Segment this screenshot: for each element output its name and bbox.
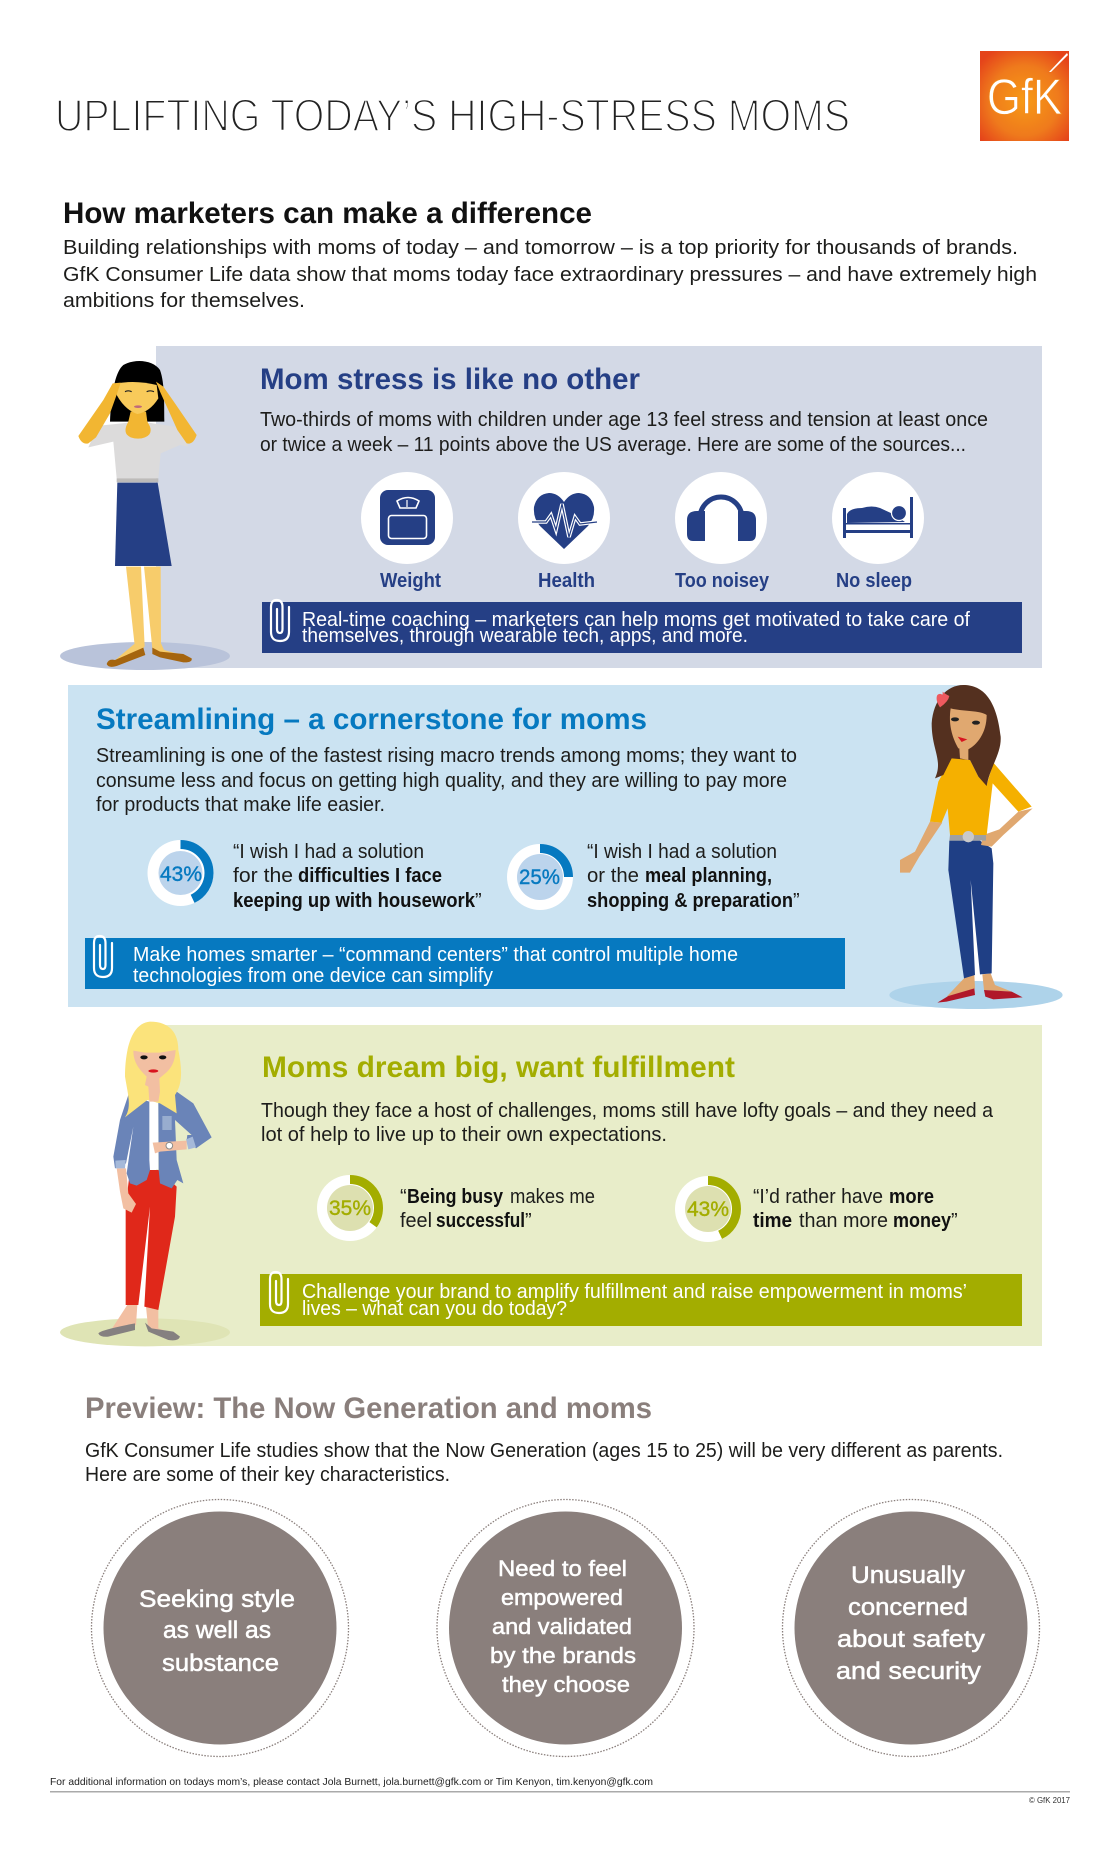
circle: empowered xyxy=(437,1500,694,1756)
circle: safety: Unusually xyxy=(851,1562,965,1589)
circle: empowered: they choose xyxy=(502,1672,630,1697)
quote: housework xyxy=(233,841,482,912)
quote: meal planning: meal planning, xyxy=(645,865,772,887)
callout: real-time coaching xyxy=(262,600,1022,653)
circle: seeking style: Seeking style xyxy=(139,1586,295,1613)
icon: weight scale xyxy=(361,472,453,564)
title: UPLIFTING TODAY’S HIGH-STRESS MOMS xyxy=(55,90,850,141)
illustration: fulfilled mom xyxy=(60,1022,230,1346)
quote: meal planning: ” xyxy=(793,890,800,912)
quote: meal planning xyxy=(587,841,800,912)
illustration: streamlining mom xyxy=(889,685,1063,1009)
quote: being busy: successful xyxy=(436,1210,525,1232)
text: streamlining paragraph: for products that make life easier. xyxy=(96,794,385,816)
quote: more time xyxy=(753,1186,958,1232)
text: goals paragraph: Though they face a host of challenges, moms still have lofty goals – and they need a xyxy=(261,1100,994,1122)
callout: challenge your brand: lives – what can you do today? xyxy=(302,1298,567,1320)
text: preview paragraph: GfK Consumer Life studies show that the Now Generation (ages 15 to 25) will be very different as parents. xyxy=(85,1440,1003,1462)
text: preview paragraph: Here are some of their key characteristics. xyxy=(85,1464,450,1486)
panel: moms dream big xyxy=(156,1025,1042,1346)
callout: real-time coaching: themselves, through wearable tech, apps, and more. xyxy=(302,625,748,647)
donut chart: 43% xyxy=(148,840,214,906)
section: preview xyxy=(85,1392,1040,1756)
circle: empowered: Need to feel xyxy=(498,1556,627,1581)
quote: housework: ” xyxy=(475,890,482,912)
panel heading: streamlining: Streamlining – a cornerstone for moms xyxy=(96,703,647,736)
callout: challenge your brand xyxy=(260,1272,1022,1326)
quote: housework: “I wish I had a solution xyxy=(233,841,424,863)
quote: being busy: makes me xyxy=(510,1186,595,1208)
circle: empowered: empowered xyxy=(501,1585,623,1610)
icon: headphones xyxy=(675,472,767,564)
circle: empowered: and validated xyxy=(492,1614,632,1639)
icon: paperclip xyxy=(270,1272,288,1313)
quote: more time: “I’d rather have xyxy=(753,1186,883,1208)
label: too noisey: Too noisey xyxy=(675,570,770,592)
logo: GfK xyxy=(980,51,1069,141)
callout: challenge your brand: Challenge your brand to amplify fulfillment and raise empowerment in moms’ xyxy=(302,1281,967,1303)
intro text: ambitions for themselves. xyxy=(63,290,305,312)
panel: streamlining xyxy=(68,685,965,1007)
quote: more time: ” xyxy=(951,1210,958,1232)
quote: being busy: ” xyxy=(525,1210,532,1232)
footer: copyright: © GfK 2017 xyxy=(1029,1795,1070,1805)
donut chart: 25% xyxy=(507,844,573,910)
circle: seeking style xyxy=(92,1500,348,1756)
quote: meal planning: or the xyxy=(587,865,639,887)
icon: bed xyxy=(832,472,924,564)
quote: being busy xyxy=(400,1186,595,1232)
quote: housework: for the xyxy=(233,865,293,887)
text: streamlining paragraph xyxy=(96,745,797,816)
donut chart: 43%: 43% xyxy=(687,1198,729,1221)
panel heading: moms dream big: Moms dream big, want fulfillment xyxy=(262,1051,735,1084)
text: stress paragraph: or twice a week – 11 points above the US average. Here are some of the sources... xyxy=(260,434,966,456)
quote: housework: difficulties I face xyxy=(298,865,442,887)
icon: paperclip xyxy=(271,600,289,641)
quote: being busy: Being busy xyxy=(407,1186,504,1208)
quote: housework: keeping up with housework xyxy=(233,890,476,912)
text: preview paragraph xyxy=(85,1440,1003,1486)
quote: being busy: feel xyxy=(400,1210,432,1232)
section heading: preview: Preview: The Now Generation and moms xyxy=(85,1392,652,1425)
callout: make homes smarter: Make homes smarter – “command centers” that control multiple home xyxy=(133,944,738,966)
callout: make homes smarter xyxy=(85,936,845,989)
logo: GfK: GfK xyxy=(987,69,1062,125)
intro text: Building relationships with moms of today – and tomorrow – is a top priority for thousands of brands. xyxy=(63,237,1018,259)
quote: meal planning: shopping & preparation xyxy=(587,890,793,912)
intro heading: How marketers can make a difference xyxy=(63,197,592,230)
label: weight: Weight xyxy=(380,570,441,592)
label: health: Health xyxy=(538,570,595,592)
intro text: GfK Consumer Life data show that moms today face extraordinary pressures – and have extremely high xyxy=(63,264,1037,286)
icon: paperclip xyxy=(94,936,112,977)
icon: health heart xyxy=(518,472,610,564)
text: streamlining paragraph: consume less and focus on getting high quality, and they are willing to pay more xyxy=(96,770,787,792)
circle: safety: concerned xyxy=(848,1594,968,1621)
text: goals paragraph xyxy=(261,1100,994,1146)
donut chart: 35% xyxy=(317,1175,383,1241)
circle: safety: about safety xyxy=(837,1626,985,1653)
callout: make homes smarter: technologies from one device can simplify xyxy=(133,965,493,987)
quote: more time: more xyxy=(889,1186,934,1208)
donut chart: 43%: 43% xyxy=(160,863,202,886)
label: no sleep: No sleep xyxy=(836,570,912,592)
circle: empowered: by the brands xyxy=(490,1643,636,1668)
footer: contact: For additional information on todays mom’s, please contact Jola Burnett, jola.burnett@gfk.com or Tim Kenyon, tim.kenyon@gfk.com xyxy=(50,1776,653,1788)
illustration: stressed mom xyxy=(60,361,230,670)
text: streamlining paragraph: Streamlining is one of the fastest rising macro trends among moms; they want to xyxy=(96,745,797,767)
quote: more time: than more xyxy=(799,1210,888,1232)
circle: seeking style: as well as xyxy=(163,1617,271,1644)
circle: seeking style: substance xyxy=(162,1650,279,1677)
donut chart: 25%: 25% xyxy=(519,866,560,889)
quote: being busy: “ xyxy=(400,1186,407,1208)
callout: real-time coaching: Real-time coaching – marketers can help moms get motivated to take care of xyxy=(302,609,970,631)
quote: meal planning: “I wish I had a solution xyxy=(587,841,777,863)
circle: safety: and security xyxy=(836,1658,981,1685)
intro text xyxy=(63,237,1037,312)
panel: mom stress xyxy=(156,346,1042,668)
circle: safety xyxy=(782,1500,1040,1756)
panel heading: mom stress: Mom stress is like no other xyxy=(260,363,640,396)
donut chart: 43% xyxy=(675,1176,741,1242)
text: goals paragraph: lot of help to live up to their own expectations. xyxy=(261,1124,667,1146)
donut chart: 35%: 35% xyxy=(329,1197,371,1220)
quote: more time: money xyxy=(893,1210,952,1232)
text: stress paragraph: Two-thirds of moms with children under age 13 feel stress and tension at least once xyxy=(260,409,988,431)
quote: more time: time xyxy=(753,1210,792,1232)
text: stress paragraph xyxy=(260,409,988,456)
